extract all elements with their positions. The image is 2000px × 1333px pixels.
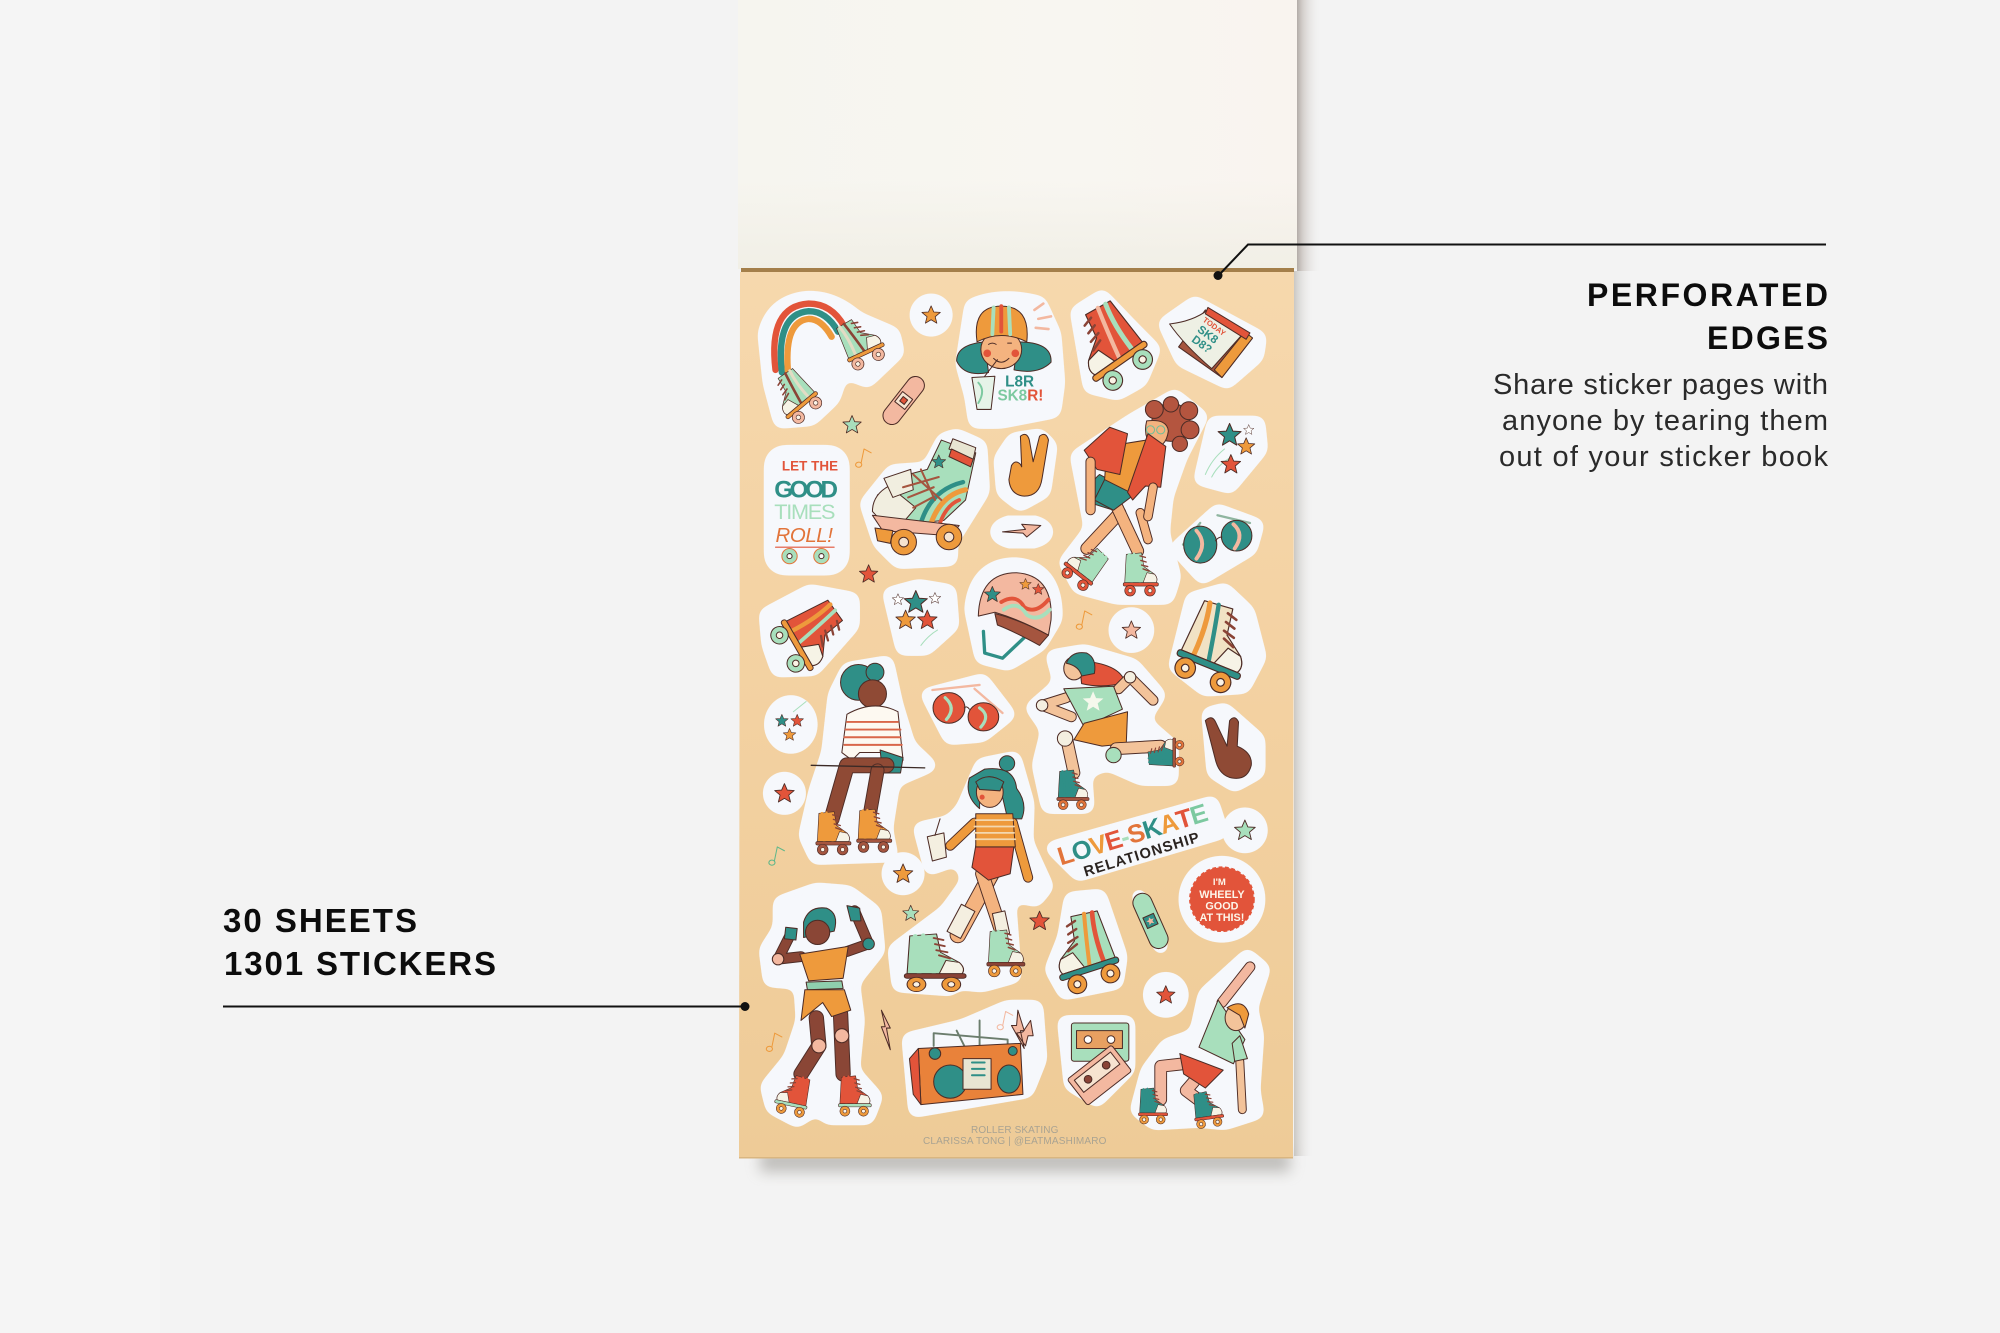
sticker: orange peace hand bbox=[1001, 434, 1050, 504]
sticker sheet artwork bbox=[763, 295, 1263, 1129]
sticker: helmet girl L8R SK8R bbox=[957, 299, 1057, 421]
sticker: boombox bbox=[909, 1008, 1040, 1110]
sticker: star burst bbox=[890, 587, 952, 648]
sticker: I'm wheely good at this badge: AT THIS! bbox=[1199, 912, 1244, 924]
sticker: peach bandage bbox=[879, 373, 928, 428]
sticker: cassette tapes bbox=[1065, 1023, 1132, 1106]
sticker: boot skate bbox=[1043, 897, 1125, 998]
sticker: star burst with trail bbox=[1202, 423, 1260, 486]
sticker: let the good times roll: TIMES bbox=[774, 499, 835, 524]
icon: pink lightning bolt bbox=[881, 1010, 890, 1050]
sticker: I'm wheely good at this badge: I'M bbox=[1213, 877, 1226, 888]
icon: mint star bbox=[903, 905, 919, 920]
background outer margin bbox=[0, 0, 160, 1333]
icon: music note bbox=[856, 449, 871, 467]
sticker: orange star small bbox=[889, 860, 917, 888]
sticker: stretching boy bbox=[1138, 957, 1263, 1129]
sticker: orange star bbox=[917, 301, 945, 329]
icon: green music note bbox=[769, 847, 784, 865]
heading: 30 sheets 1301 stickers: 1301 STICKERS bbox=[224, 945, 496, 982]
text block: perforated edges description bbox=[1493, 369, 1828, 473]
sticker: red star with blob bbox=[1151, 980, 1181, 1010]
sheet credit text: ROLLER SKATING bbox=[971, 1125, 1059, 1136]
arrow: perforated edges leader line bbox=[1214, 244, 1826, 280]
sticker: mint bandage bbox=[1130, 890, 1171, 952]
sticker: let the good times roll bbox=[772, 453, 842, 568]
curly hair bbox=[1145, 397, 1199, 452]
sticker: brown peace hand bbox=[1205, 710, 1258, 784]
heading: perforated edges bbox=[1587, 277, 1828, 356]
sticker: helmet girl L8R SK8R: SK8R! bbox=[997, 388, 1043, 405]
sticker: green star bbox=[1230, 815, 1260, 846]
icon: red star bbox=[859, 565, 878, 582]
text block: perforated edges description: anyone by tearing them bbox=[1502, 405, 1828, 437]
sticker book drop shadow bbox=[760, 0, 1321, 1172]
sticker: big green skate bbox=[867, 436, 982, 561]
sticker: red sunglasses bbox=[929, 681, 1008, 737]
sheet credit text bbox=[923, 1125, 1107, 1147]
sticker: red star small bbox=[770, 779, 798, 807]
sticker: let the good times roll: ROLL! bbox=[776, 525, 833, 547]
icon: teal star bbox=[843, 416, 861, 433]
sticker: let the good times roll: LET THE bbox=[782, 459, 838, 474]
heading: 30 sheets 1301 stickers bbox=[223, 902, 496, 982]
sticker: dancing girl in orange bbox=[767, 890, 878, 1120]
sticker: calendar today sk8 d8: TODAY bbox=[1201, 315, 1227, 338]
sticker: upright skate bbox=[1169, 591, 1263, 698]
sticker: calendar today sk8 d8: SK8 bbox=[1195, 324, 1220, 347]
icon: orange music notes bbox=[766, 1033, 782, 1051]
sticker: calendar today sk8 d8 bbox=[1166, 304, 1259, 381]
sticker: skater in green shirt bbox=[1033, 652, 1184, 810]
top page: blank cream sheet bbox=[738, 0, 1297, 272]
sheet credit text: CLARISSA TONG | @EATMASHIMARO bbox=[923, 1136, 1107, 1147]
sticker: red skate bbox=[1060, 295, 1159, 397]
arrow: sheets leader line bbox=[223, 1002, 750, 1011]
sticker: pink helmet bbox=[972, 565, 1055, 663]
sticker: walking girl with drink bbox=[895, 756, 1046, 992]
sticker sheet backing bbox=[739, 272, 1294, 1158]
sticker: I'm wheely good at this badge: WHEELY bbox=[1199, 889, 1245, 901]
heading: perforated edges: EDGES bbox=[1707, 320, 1828, 356]
heading: perforated edges: PERFORATED bbox=[1587, 277, 1828, 313]
sticker: I'm wheely good at this badge: GOOD bbox=[1205, 900, 1239, 912]
sticker: rainbow with two skates bbox=[763, 298, 897, 428]
sticker: small star burst bbox=[772, 702, 810, 746]
text block: perforated edges description: out of your sticker book bbox=[1499, 441, 1828, 473]
sticker: helmet girl L8R SK8R: L8R bbox=[1005, 373, 1034, 390]
sticker: lightning bolt bbox=[997, 522, 1046, 542]
sticker: sitting girl in striped top bbox=[806, 663, 929, 857]
sticker: teal sunglasses bbox=[1177, 511, 1256, 577]
sticker: love-skate relationship: RELATIONSHIP bbox=[1082, 830, 1202, 880]
sticker: love-skate relationship: LOVE-SKATE bbox=[1054, 799, 1211, 871]
heading: 30 sheets 1301 stickers: 30 SHEETS bbox=[223, 902, 417, 939]
icon: music notes bbox=[1076, 611, 1092, 629]
sticker: sideways red skate bbox=[766, 592, 856, 680]
sticker: pink star bbox=[1116, 615, 1147, 645]
sticker: calendar today sk8 d8: D8? bbox=[1189, 334, 1214, 356]
sticker: let the good times roll: GOOD bbox=[774, 476, 838, 503]
text block: perforated edges description: Share sticker pages with bbox=[1493, 369, 1828, 401]
sticker: curly haired skater bbox=[1057, 397, 1200, 597]
icon: red star bbox=[1030, 911, 1049, 930]
sticker: I'm wheely good at this badge bbox=[1186, 864, 1258, 935]
